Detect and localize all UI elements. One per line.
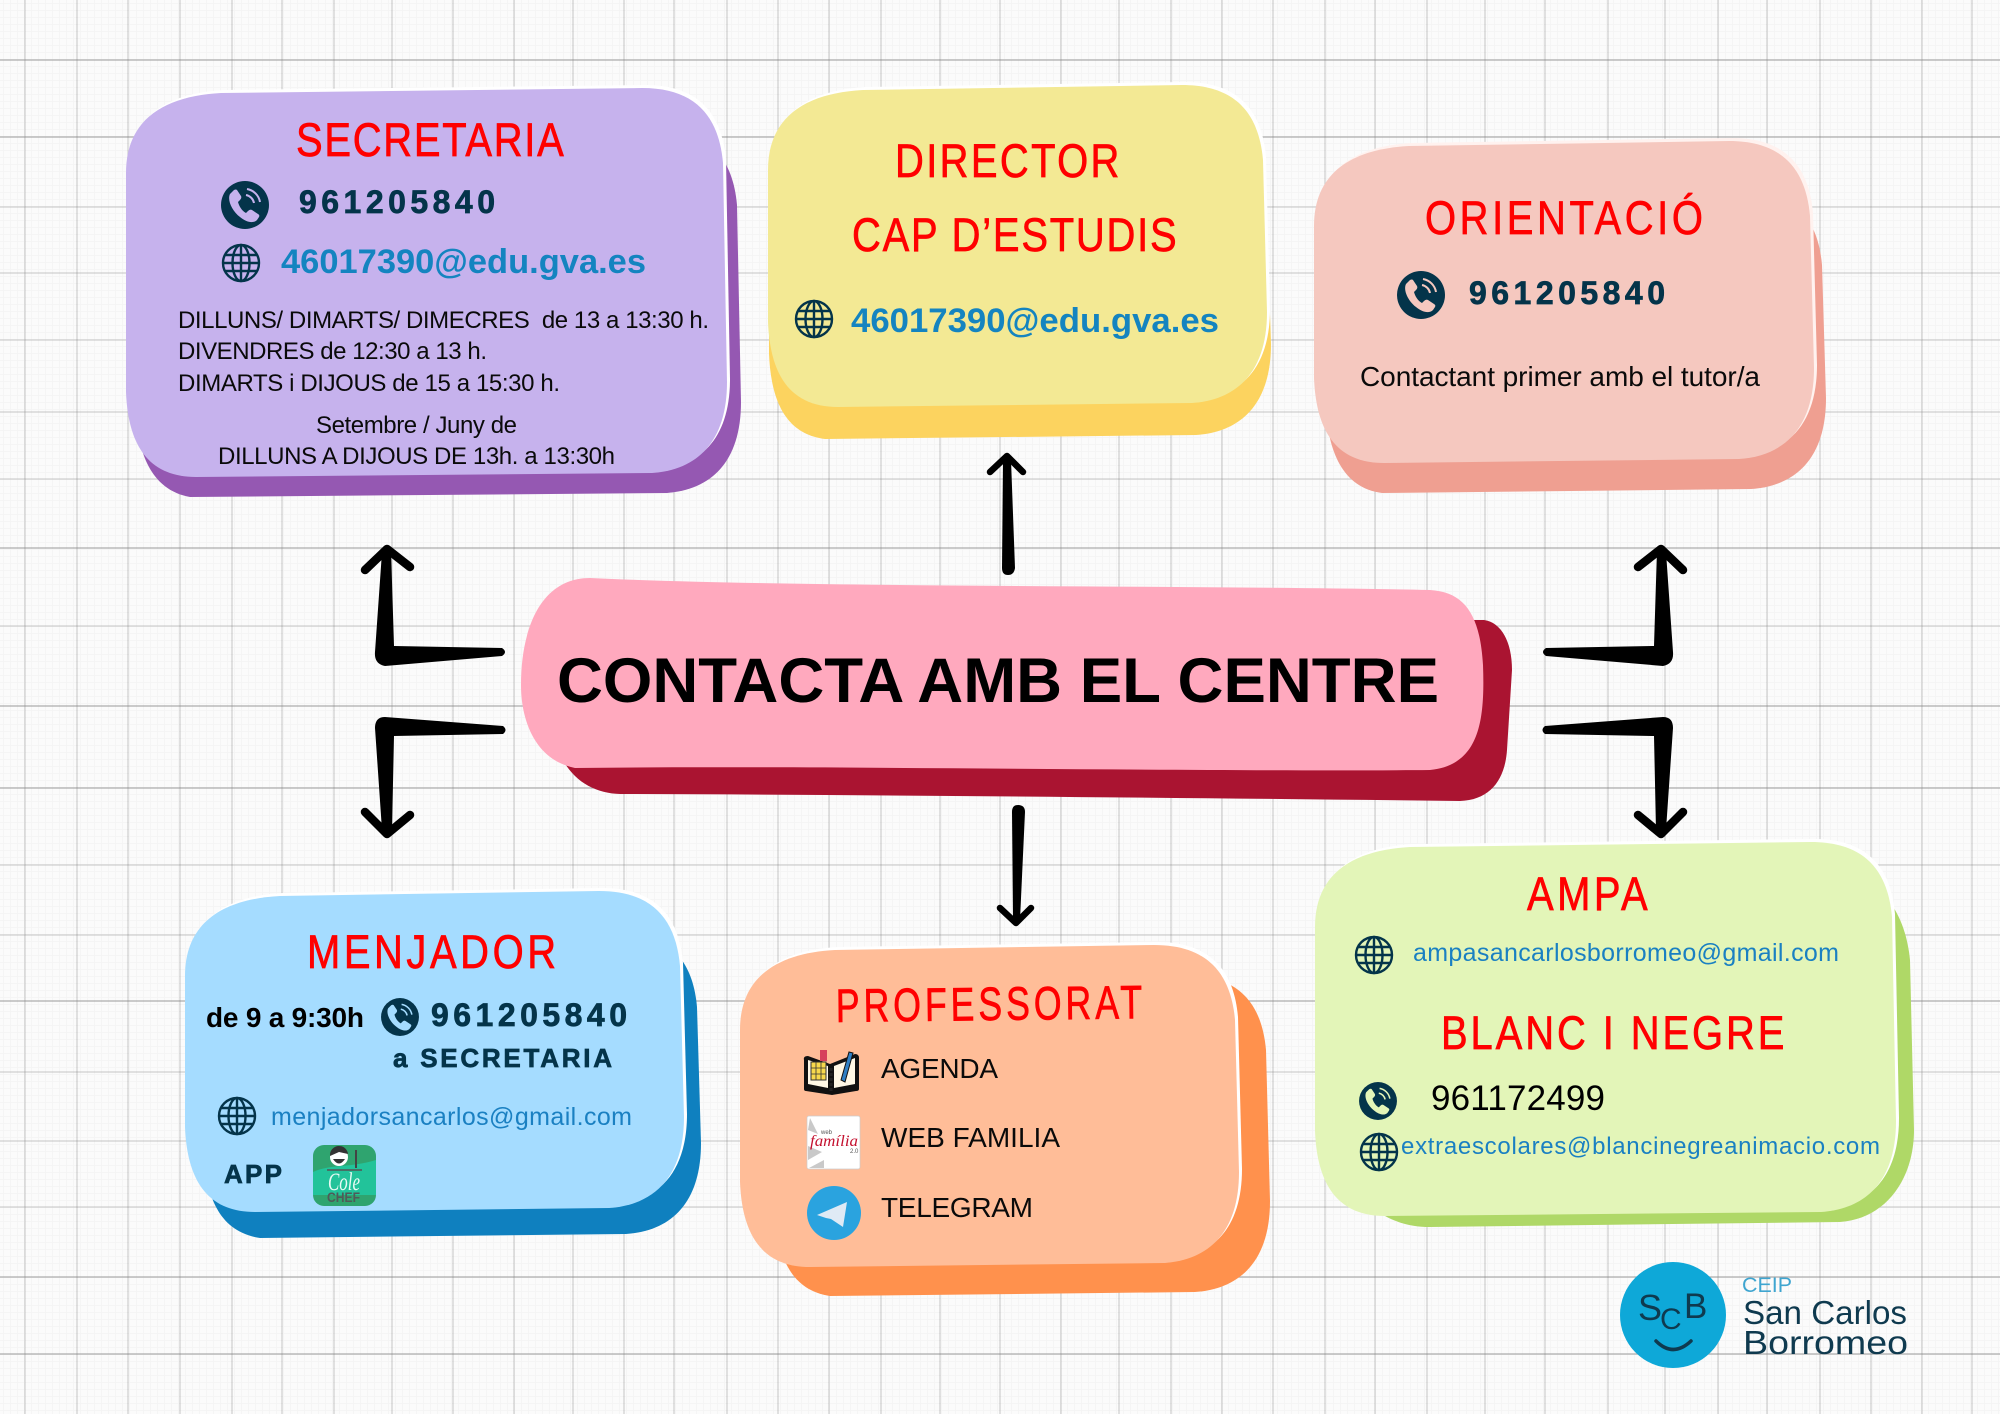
logo: san carlos borromeo: C [1660, 1303, 1682, 1336]
icon: phone [1397, 271, 1445, 319]
icon: globe [796, 301, 832, 337]
menjador face [185, 891, 684, 1212]
orientacio face [1314, 141, 1814, 463]
phone number: 961205840 [299, 184, 495, 220]
central banner [521, 578, 1512, 801]
email: ampasancarlosborromeo@gmail.com [1413, 939, 1839, 967]
logo: san carlos borromeo: S [1638, 1287, 1662, 1328]
director shadow [769, 150, 1271, 439]
panel: menjador [185, 888, 701, 1238]
logo: san carlos borromeo: CEIP [1742, 1274, 1792, 1297]
icon: cole chef app [313, 1145, 376, 1206]
heading: cap d'estudis: CAP D’ESTUDIS [852, 210, 1177, 262]
icon: phone [221, 181, 269, 229]
icon: phone [1359, 1082, 1397, 1120]
menjador shadow [204, 932, 701, 1238]
icon: web familia: 2.0 [850, 1149, 859, 1155]
professorat white edge [743, 942, 1242, 1264]
heading: director: DIRECTOR [895, 136, 1119, 188]
opening hours: Setembre / Juny de [316, 412, 517, 439]
ampa white edge [1318, 839, 1899, 1213]
arrow: to professorat [1000, 805, 1031, 923]
icon: web familia: família [810, 1133, 858, 1150]
arrow: to orientacio [1543, 549, 1683, 666]
email: 46017390@edu.gva.es [851, 302, 1219, 340]
text: agenda: AGENDA [881, 1053, 998, 1084]
professorat shadow [775, 975, 1270, 1296]
icon: globe [1356, 937, 1392, 973]
ampa shadow [1350, 892, 1914, 1227]
icon: agenda [804, 1050, 859, 1095]
opening hours: DIMARTS i DIJOUS de 15 a 15:30 h. [178, 370, 560, 397]
opening hours: DILLUNS A DIJOUS DE 13h. a 13:30h [218, 443, 615, 470]
title: CONTACTA AMB EL CENTRE [557, 646, 1439, 716]
director face [768, 85, 1267, 407]
arrow: to ampa [1542, 717, 1683, 834]
panel: orientacio [1314, 138, 1826, 493]
secretaria white edge [129, 85, 730, 474]
opening hours [178, 307, 709, 470]
ampa face [1315, 842, 1896, 1216]
icon: globe [1361, 1134, 1397, 1170]
panel: professorat [740, 942, 1270, 1296]
icon: globe [219, 1098, 255, 1134]
phone number: 961205840 [1469, 275, 1665, 311]
logo: san carlos borromeo: Borromeo [1743, 1324, 1908, 1361]
app label: APP [224, 1159, 282, 1189]
heading: secretaria: SECRETARIA [296, 115, 564, 167]
orientacio shadow [1326, 190, 1826, 493]
icon: globe [223, 245, 259, 281]
menjador white edge [188, 888, 687, 1209]
secretaria shadow [137, 130, 741, 497]
email: 46017390@edu.gva.es [281, 243, 646, 281]
logo: san carlos borromeo: San Carlos [1743, 1294, 1907, 1331]
arrow: to secretaria [365, 549, 505, 666]
opening hours: DILLUNS/ DIMARTS/ DIMECRES de 13 a 13:30 h. [178, 307, 709, 334]
heading: ampa: AMPA [1527, 869, 1648, 921]
icon: phone [381, 998, 419, 1036]
logo: san carlos borromeo: B [1684, 1287, 1707, 1326]
icon: telegram [807, 1186, 861, 1240]
phone number: 961205840 [431, 997, 627, 1033]
opening hours: DIVENDRES de 12:30 a 13 h. [178, 338, 487, 365]
professorat face [740, 945, 1239, 1267]
email: menjadorsancarlos@gmail.com [271, 1103, 632, 1131]
panel: director [768, 82, 1271, 439]
director white edge [771, 82, 1270, 404]
banner shadow [550, 620, 1512, 801]
text: web familia: WEB FAMILIA [881, 1122, 1060, 1153]
heading: professorat: PROFESSORAT [835, 975, 1142, 1032]
text: telegram: TELEGRAM [881, 1192, 1033, 1223]
icon: web familia: web [820, 1130, 833, 1136]
arrow: to menjador [365, 717, 506, 834]
heading: blanc i negre: BLANC I NEGRE [1441, 1008, 1784, 1060]
note: Contactant primer amb el tutor/a [1360, 361, 1760, 392]
secretaria face [126, 88, 727, 477]
orientacio light edge [1317, 138, 1817, 460]
logo: san carlos borromeo [1620, 1262, 1908, 1368]
panel: secretaria [126, 85, 741, 497]
time: de 9 a 9:30h [206, 1002, 364, 1033]
arrow: to director [990, 456, 1023, 575]
phone number: 961172499 [1431, 1079, 1605, 1118]
heading: orientacio: ORIENTACIÓ [1425, 192, 1703, 245]
a secretaria: a SECRETARIA [393, 1043, 612, 1073]
icon: web familia [807, 1116, 860, 1169]
icon: cole chef app: Cole [328, 1169, 360, 1196]
icon: cole chef app: CHEF [327, 1189, 360, 1205]
email: extraescolares@blancinegreanimacio.com [1401, 1133, 1880, 1160]
heading: menjador: MENJADOR [307, 927, 556, 979]
banner face [521, 578, 1483, 770]
panel: ampa and blanc i negre [1315, 839, 1914, 1227]
